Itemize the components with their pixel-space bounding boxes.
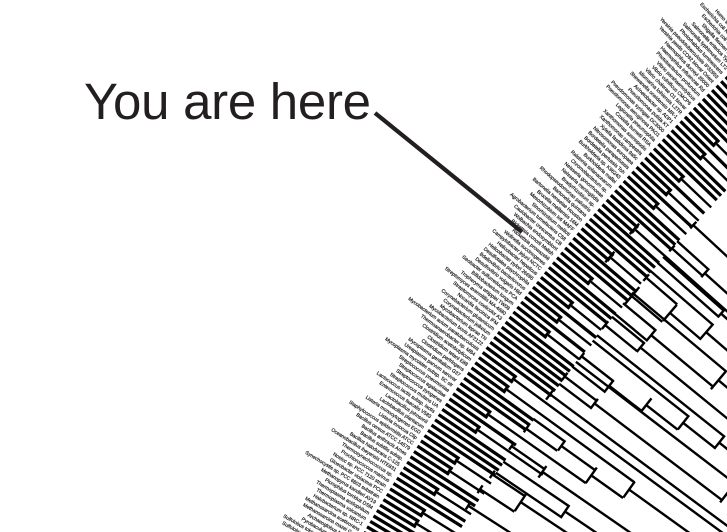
leaf labels: Tropheryma whipplei TW08 <box>459 270 511 312</box>
leaf labels: Wolbachia endosymbiont <box>512 212 559 253</box>
leaf labels: Agrobacterium tumefaciens C58 <box>508 192 567 243</box>
leaf labels: Thermoplasma acidophilum <box>315 480 370 516</box>
leaf labels: Bacillus anthracis Ames <box>360 423 408 457</box>
leaf labels: Vibrio vulnificus CMCP6 <box>650 65 692 107</box>
leaf labels: Haemophilus ducreyi 35000 <box>663 40 710 89</box>
leaf labels: Chromobacterium sp. <box>569 158 609 195</box>
leaf labels: Helicobacter pylori 26695 <box>487 242 535 282</box>
leaf labels: Mesorhizobium loti MAFF <box>528 191 575 233</box>
leaf labels: Streptomyces avermitilis MA-4680 <box>443 266 507 317</box>
leaf labels: Sinorhizobium meliloti <box>530 202 571 238</box>
leaf labels: Corynebacterium glutamicum <box>440 288 495 332</box>
leaf labels: Listeria monocytogenes EGD <box>364 395 422 436</box>
leaf labels: Geobacter sulfurreducens PCA <box>460 254 519 302</box>
leaf labels: Mycoplasma genitalium G37 <box>407 337 462 378</box>
leaf labels: Pseudomonas aeruginosa PAO1 <box>604 84 661 139</box>
leaf labels: Mycobacterium bovis AF2122 <box>428 303 484 348</box>
leaf labels: Nitrosomonas europaea <box>591 126 635 167</box>
leaf labels: Listeria innocua Clip <box>377 411 418 441</box>
leaf labels: Halobacterium sp. NRC-1 <box>312 493 364 528</box>
leaf labels: Clostridium tetani E88 <box>426 334 469 368</box>
leaf labels: Legionella pneumophila <box>614 102 656 143</box>
leaf labels: Desulfovibrio vulgaris Hild <box>474 256 523 297</box>
leaf labels: Streptococcus mutans UA <box>388 372 440 410</box>
leaf labels: Bdellovibrio bacteriovorus <box>478 252 527 292</box>
leaf labels: Caulobacter crescentus CB <box>512 204 563 248</box>
leaf labels: Yersinia pestis CO92 biovar Orient <box>657 25 715 85</box>
leaf labels: Vibrio parahaemolyticus <box>655 60 697 103</box>
leaf labels: Streptococcus pneumoniae <box>397 354 450 394</box>
leaf labels: Neisseria gonorrhoeae <box>563 161 605 199</box>
leaf labels: Yersinia pseudotuberculosis IP32953 <box>658 17 720 80</box>
leaf labels: Methanopyrus kandleri AV19 <box>320 467 377 506</box>
leaf labels: Bordetella pertussis Toh <box>583 135 626 176</box>
leaf labels: Brucella melitensis 16M <box>535 189 579 228</box>
leaf labels: Photorhabdus luminescens <box>678 28 724 76</box>
leaf labels: Streptomyces coelicolor A3 <box>451 281 503 322</box>
leaf labels: Mycoplasma mycoides subsp. SC str <box>384 336 454 389</box>
leaf labels: Vibrio cholerae O1 biovar <box>643 67 688 112</box>
arrow: pointer line <box>375 113 522 232</box>
leaf labels: Burkholderia mallei <box>582 152 617 185</box>
leaf labels: Bacillus halodurans C-125 <box>348 431 401 468</box>
leaf labels: Streptococcus agalactiae <box>397 362 447 399</box>
leaf labels: Bartonella henselae Houston <box>531 177 584 223</box>
leaf labels: Bartonella quintana <box>551 186 588 219</box>
leaf labels: Xanthomonas campestris <box>598 114 644 157</box>
leaf labels: Pseudomonas putida KT <box>626 87 670 130</box>
leaf labels: Thermoplasma volcanium <box>315 487 367 522</box>
leaf labels: Clostridium perfringens <box>420 338 465 373</box>
leaf labels: Bordetella parapertussis <box>586 130 631 171</box>
leaf labels: Lactobacillus plantarum <box>378 396 425 431</box>
leaf labels: Shewanella oneidensis MR-1 <box>628 71 679 121</box>
leaf labels: Methanosarcina acetivorans <box>304 496 361 532</box>
leaf labels: Mycobacterium leprae TN <box>438 303 488 342</box>
leaf labels: Clostridium acetobutylicum <box>421 323 473 363</box>
title: You are here: You are here <box>84 73 371 130</box>
leaf labels: Synechocystis sp. PCC 6803 substrain <box>304 450 381 500</box>
leaf labels: Enterococcus faecalis V583 <box>378 380 432 420</box>
leaf labels: Lactococcus lactis subsp. lactis <box>375 371 436 415</box>
leaf labels: Bradyrhizobium sp. <box>560 176 596 209</box>
leaf labels: Photobacterium profundum <box>655 51 701 98</box>
leaf labels: Xanthomonas axonopodis <box>601 108 648 153</box>
leaf labels: Lactobacillus johnsonii <box>384 392 429 425</box>
leaf labels: Bacillus cereus ATCC 14579 <box>355 412 411 452</box>
leaf labels: Bifidobacterium longum <box>470 270 515 307</box>
leaf labels: Helicobacter hepaticus <box>495 240 539 277</box>
leaf labels: Desulfotalea psychrophila <box>482 246 531 287</box>
leaf labels: Ureaplasma parvum serovar <box>403 342 458 384</box>
leaf labels: Bacillus subtilis subsp. <box>359 430 404 462</box>
leaf labels: Thermosynechococcus sp. <box>340 442 394 479</box>
leaf labels: Campylobacter jejuni NCTC <box>491 228 543 272</box>
leaf labels: Thermoanaerobacter sp. MB4 <box>419 314 476 358</box>
leaf labels: Haemophilus influenzae Rd <box>659 46 706 94</box>
leaf labels: Coxiella burnetii RSA <box>614 111 652 148</box>
leaf labels: Prochlorococcus marinus <box>340 449 391 484</box>
leaf labels: Acinetobacter sp. ADP1 <box>632 84 674 125</box>
leaf labels: Corynebacterium jeikeium <box>442 298 491 337</box>
leaf labels: Picrophilus torridus DSM <box>324 477 374 511</box>
leaf labels: Idiomarina loihiensis L2TR <box>637 70 683 116</box>
leaf labels: Streptococcus pyogenes <box>395 368 443 405</box>
leaf labels: Rickettsia conorii Malish <box>510 218 555 257</box>
leaf labels: Oceanobacillus iheyensis HTE831 <box>330 427 397 473</box>
leaf labels: Xylella fastidiosa 9a5c <box>599 124 639 162</box>
leaf labels: Nostoc sp. PCC 7120 strain <box>332 452 387 489</box>
leaf labels: Mycobacterium avium paratuberculosis <box>407 296 480 353</box>
leaf labels: Wolinella succinogenes <box>502 229 547 267</box>
leaf labels: Burkholderia sp. K96243 <box>577 139 622 181</box>
leaf labels: Pseudomonas syringae DC3000 <box>609 80 665 134</box>
leaf labels: Staphylococcus epidermidis ATCC <box>347 400 415 447</box>
leaf labels: Nocardia farcinica IFM <box>456 292 499 327</box>
leaf labels: Rhodopseudomonas palustris <box>538 166 592 214</box>
leaf labels: Ralstonia solanacearum <box>569 149 613 190</box>
leaf labels: Rickettsia prowazekii <box>511 228 551 262</box>
leaf labels: Gloeobacter violaceus PCC <box>328 457 384 495</box>
leaf labels: Neisseria meningitidis <box>560 167 601 204</box>
leaf labels <box>274 2 727 532</box>
